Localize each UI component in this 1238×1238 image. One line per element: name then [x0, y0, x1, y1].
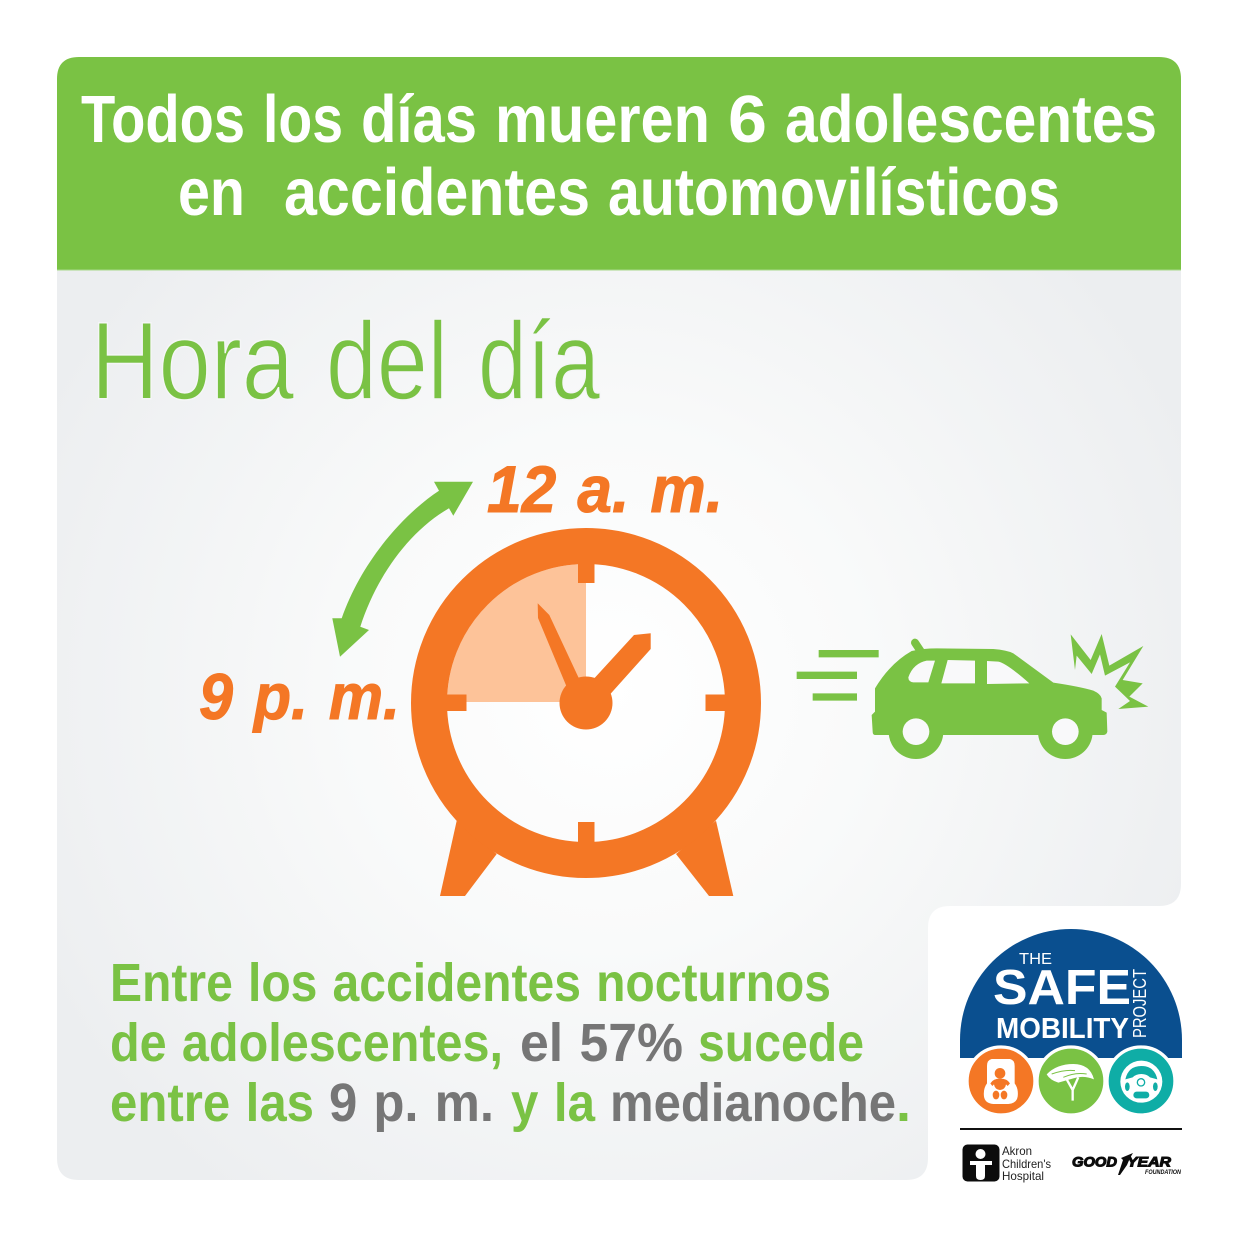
divider line	[960, 1128, 1182, 1130]
title line 1: adolescentes	[785, 82, 1157, 157]
panel: green header	[57, 57, 1181, 270]
icon: bicycle helmet	[1037, 1047, 1105, 1115]
crash burst	[1071, 634, 1148, 709]
label: 12 a. m.: 12 a. m.	[487, 452, 723, 526]
title line 1: mueren	[495, 82, 710, 157]
Akron text: Children's	[1002, 1157, 1051, 1171]
clock hub	[560, 676, 612, 730]
car body	[872, 648, 1107, 759]
line 3: .	[896, 1073, 911, 1133]
logo wordmark: MOBILITY	[996, 1013, 1129, 1045]
logo: Goodyear Foundation: YEAR	[1127, 1154, 1171, 1170]
logo wordmark	[993, 951, 1150, 1045]
heading: Hora del día	[91, 300, 601, 423]
car antenna	[915, 643, 922, 653]
logo: Goodyear Foundation	[1072, 1153, 1181, 1176]
body text	[110, 953, 911, 1133]
title line 2: automovilísticos	[608, 155, 1060, 230]
line 2: el 57%	[520, 1013, 683, 1073]
clock wedge 9 pm to 12 am	[447, 564, 586, 702]
Akron text	[1002, 1144, 1051, 1183]
logo blue dome	[960, 929, 1182, 1058]
title line 1: días	[361, 82, 477, 157]
car windows and hubs	[908, 660, 1029, 684]
icon: clock	[429, 546, 743, 896]
icon: steering wheel	[1107, 1047, 1175, 1115]
wingfoot	[1118, 1153, 1133, 1175]
title line 2	[178, 155, 1060, 230]
title line 1: los	[263, 82, 343, 157]
logo wordmark: PROJECT	[1130, 969, 1150, 1038]
clock hands	[538, 603, 651, 700]
arrow: double-headed curved	[332, 482, 473, 657]
Akron text: Hospital	[1002, 1169, 1044, 1183]
panel: grey background	[57, 270, 1181, 1180]
logo: The Safe Mobility Project	[960, 929, 1182, 1115]
icon: crashing car	[797, 634, 1148, 759]
heading: Hora del día: Hora	[91, 300, 295, 423]
clock legs	[440, 821, 733, 896]
title line 1: 6	[728, 82, 767, 157]
icon: car seat	[967, 1047, 1035, 1115]
title line 1: Todos	[81, 82, 245, 157]
logo wordmark: SAFE	[993, 961, 1131, 1015]
logo: Goodyear Foundation: GOOD	[1072, 1154, 1117, 1170]
Akron text: Akron	[1002, 1144, 1032, 1158]
line 2: sucede	[698, 1013, 864, 1073]
title line 2: en	[178, 155, 245, 230]
heading: Hora del día: día	[478, 300, 601, 423]
label: 9 p. m.: 9 p. m.	[199, 660, 400, 733]
clock ring	[429, 546, 743, 860]
speed lines	[797, 650, 879, 701]
logo wordmark: THE	[1019, 951, 1052, 968]
Akron emblem	[962, 1144, 1000, 1182]
line 3: medianoche	[610, 1073, 896, 1133]
line 3: 9 p. m.	[329, 1073, 494, 1133]
logo icons	[967, 1047, 1175, 1115]
line 1: Entre los accidentes nocturnos	[110, 953, 831, 1013]
line 3: entre las	[110, 1073, 314, 1133]
heading: Hora del día: del	[326, 300, 448, 423]
title line 1	[81, 82, 1157, 157]
line 3: y la	[511, 1073, 596, 1133]
line 2: de adolescentes,	[110, 1013, 503, 1073]
title line 2: accidentes	[284, 155, 590, 230]
clock ticks	[446, 563, 726, 843]
logo: Akron Children's Hospital	[962, 1144, 1051, 1183]
logo: Goodyear Foundation: FOUNDATION	[1145, 1169, 1181, 1176]
line 2	[110, 1013, 864, 1073]
line 3	[110, 1073, 911, 1133]
